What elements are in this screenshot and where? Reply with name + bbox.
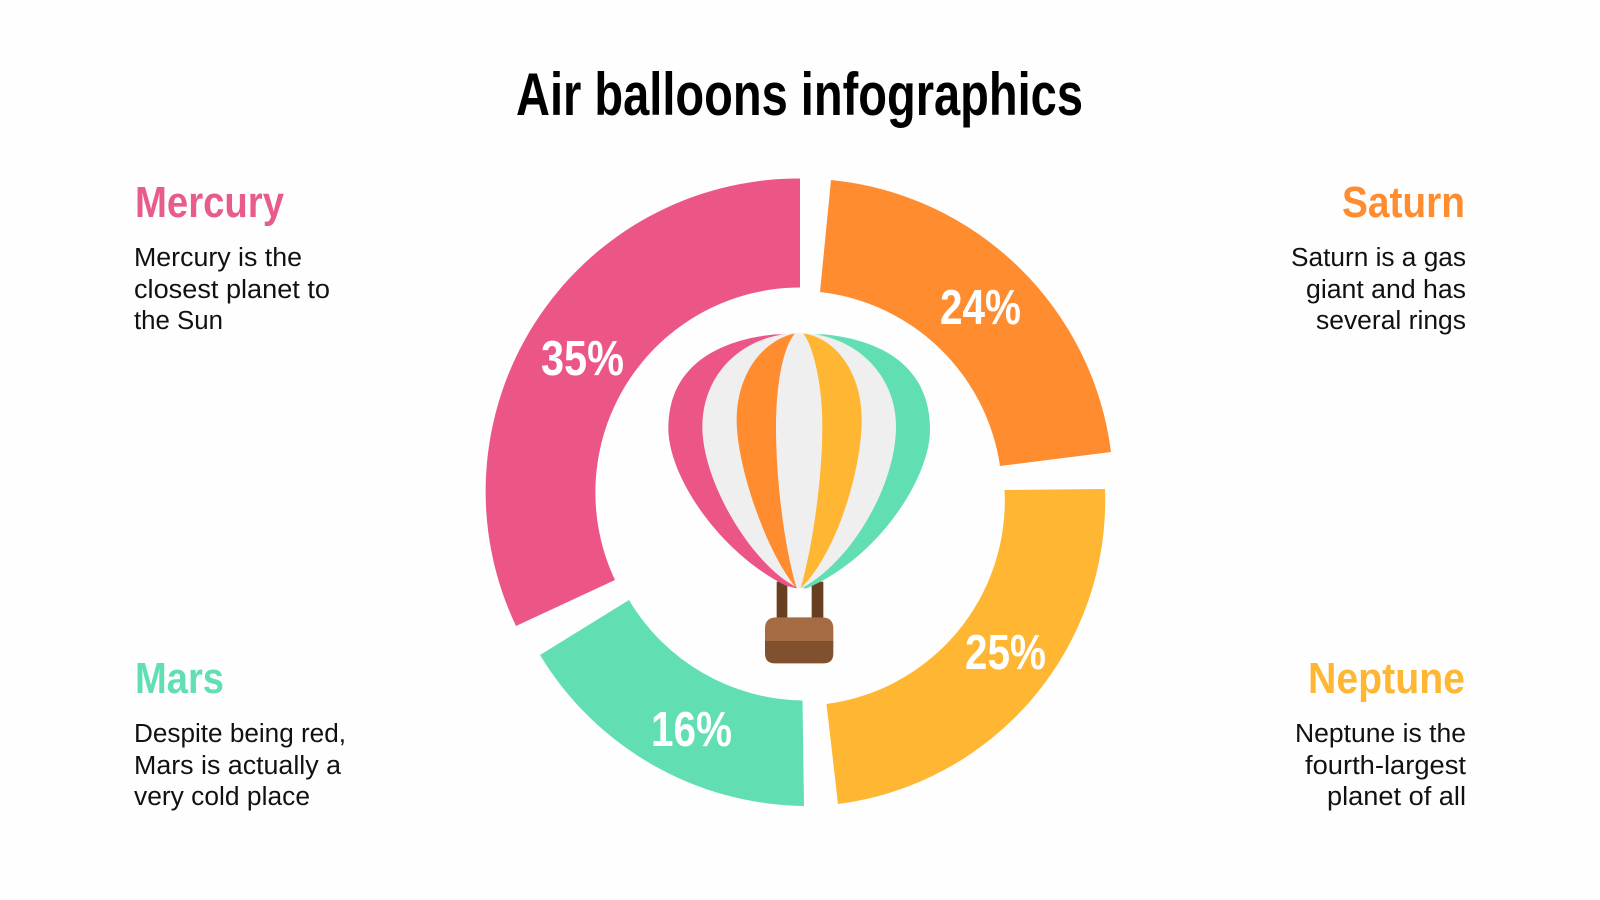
value: 25%: 25% xyxy=(965,626,1046,680)
value: 24%: 24% xyxy=(940,281,1021,335)
icon: hot air balloon xyxy=(668,333,930,663)
heading: Saturn: Saturn xyxy=(1342,178,1465,227)
title: Air balloons infographics xyxy=(516,61,1083,128)
text: Mercury description: the Sun xyxy=(134,307,223,335)
segment: Mars 16% xyxy=(540,600,804,806)
text: Neptune description: Neptune is the xyxy=(1295,720,1466,748)
text: Mars description: Mars is actually a xyxy=(134,752,342,780)
segment: Saturn 24% xyxy=(820,180,1111,466)
text: Saturn description: several rings xyxy=(1316,307,1466,335)
text: Saturn description xyxy=(1291,244,1466,335)
text: Mercury description xyxy=(134,244,330,335)
text: Mercury description: closest planet to xyxy=(134,276,330,304)
text: Mars description xyxy=(134,720,346,811)
balloon ropes xyxy=(777,582,823,620)
text: Neptune description xyxy=(1295,720,1466,811)
balloon envelope xyxy=(668,333,930,588)
text: Saturn description: giant and has xyxy=(1306,276,1466,304)
heading: Neptune: Neptune xyxy=(1308,654,1465,703)
text: Neptune description: planet of all xyxy=(1327,783,1466,811)
panel: Mars xyxy=(134,654,346,811)
text: Saturn description: Saturn is a gas xyxy=(1291,244,1466,272)
segment: Mercury 35% xyxy=(486,178,800,626)
text: Mercury description: Mercury is the xyxy=(134,244,302,272)
panel: Saturn xyxy=(1291,178,1466,335)
panel: Mercury xyxy=(134,178,330,335)
donut chart xyxy=(486,178,1111,806)
text: Mars description: very cold place xyxy=(134,783,310,811)
text: Mars description: Despite being red, xyxy=(134,720,346,748)
heading: Mars: Mars xyxy=(135,654,224,703)
text: Neptune description: fourth-largest xyxy=(1305,752,1466,780)
balloon basket xyxy=(765,617,833,663)
value: 35%: 35% xyxy=(541,332,624,386)
segment: Neptune 25% xyxy=(826,489,1105,804)
value: 16%: 16% xyxy=(651,703,732,757)
heading: Mercury: Mercury xyxy=(135,178,284,227)
panel: Neptune xyxy=(1295,654,1466,811)
